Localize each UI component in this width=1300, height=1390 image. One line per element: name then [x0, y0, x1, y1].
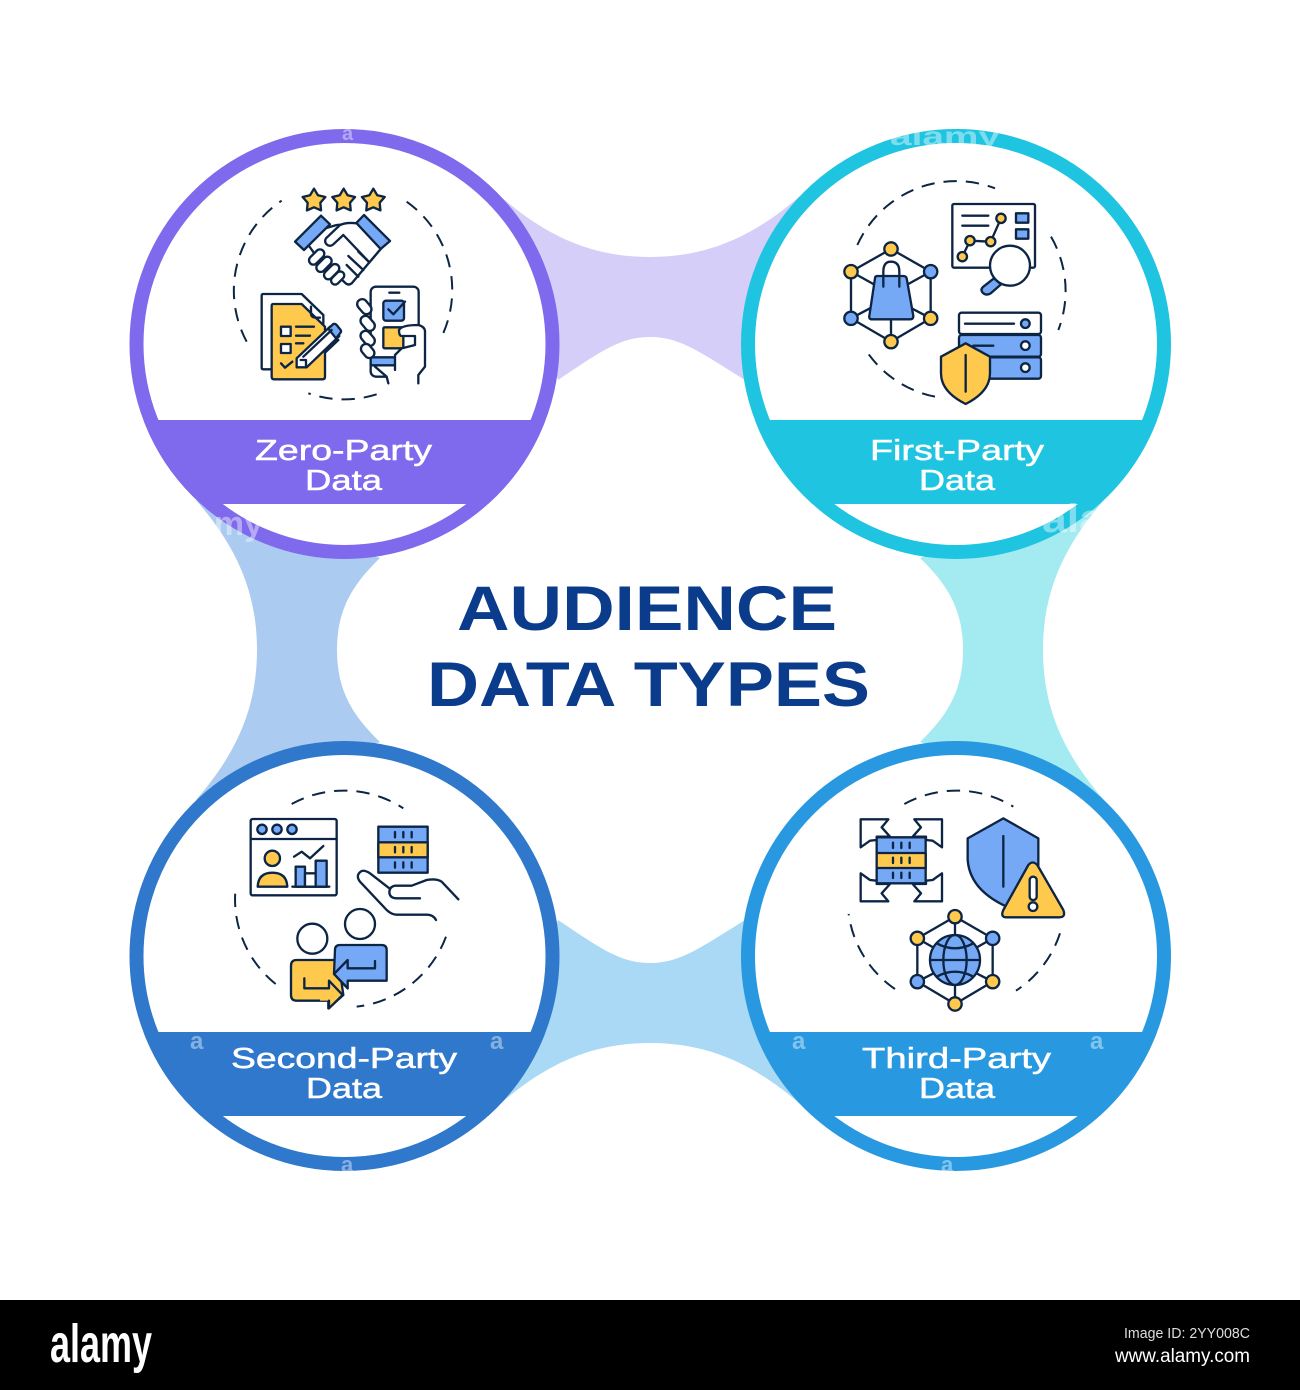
panel: first-party data	[730, 121, 1180, 552]
label: second-party data: Second-Party	[231, 1043, 458, 1075]
icon: handshake, stars, survey and phone	[234, 189, 452, 399]
connector: top purple	[500, 196, 800, 380]
watermark: zero-party: a	[342, 123, 354, 145]
label: second-party data	[231, 1043, 458, 1105]
connector: right teal	[920, 500, 1104, 800]
label: zero-party data	[255, 435, 433, 497]
label: first-party data: Data	[919, 465, 996, 497]
icon: dashboard, data in hand and exchange between people	[235, 791, 458, 1008]
watermark: second-party: a	[190, 1028, 204, 1055]
panel: zero-party data	[120, 123, 570, 552]
watermark: second-party: a	[341, 1152, 354, 1177]
label band: third-party	[755, 1032, 1157, 1116]
title: DATA TYPES	[427, 650, 870, 720]
label: third-party data	[862, 1043, 1052, 1105]
watermark: first-party	[890, 121, 1105, 541]
footer logo: alamy	[50, 1314, 152, 1374]
label: second-party data: Data	[306, 1073, 383, 1105]
footer bar	[0, 1300, 1300, 1390]
watermark: third-party: a	[1090, 1028, 1104, 1055]
label band: second-party	[144, 1032, 546, 1116]
watermark: zero-party	[195, 123, 354, 543]
title: AUDIENCE	[457, 574, 837, 644]
title	[427, 574, 870, 720]
watermark: first-party: ala	[1042, 497, 1105, 541]
label band: first-party	[755, 420, 1157, 504]
connector: left blue	[196, 500, 380, 800]
panel: second-party data	[120, 748, 570, 1177]
label: first-party data: First-Party	[870, 435, 1045, 467]
label: third-party data: Third-Party	[862, 1043, 1052, 1075]
watermark: third-party: a	[792, 1028, 806, 1055]
watermark: first-party: alamy	[890, 121, 1001, 151]
label: first-party data	[870, 435, 1045, 497]
connector: bottom light blue	[500, 920, 800, 1104]
watermark: third-party: a	[941, 1152, 954, 1177]
label: zero-party data: Zero-Party	[255, 435, 433, 467]
watermark: third-party	[792, 1028, 1104, 1177]
watermark: second-party	[190, 1028, 504, 1177]
icon: server expansion, shield warning and global network	[849, 791, 1064, 1011]
panel: third-party data	[730, 748, 1180, 1177]
label band: zero-party	[144, 420, 546, 504]
label: third-party data: Data	[919, 1073, 996, 1105]
label: zero-party data: Data	[305, 465, 383, 497]
image id: Image ID: 2YY008C	[1124, 1325, 1250, 1342]
watermark: second-party: a	[490, 1028, 504, 1055]
icon: shopping network, analytics report and secure server	[844, 181, 1066, 404]
watermark: zero-party: amy	[195, 505, 263, 543]
website: www.alamy.com	[1114, 1346, 1250, 1367]
